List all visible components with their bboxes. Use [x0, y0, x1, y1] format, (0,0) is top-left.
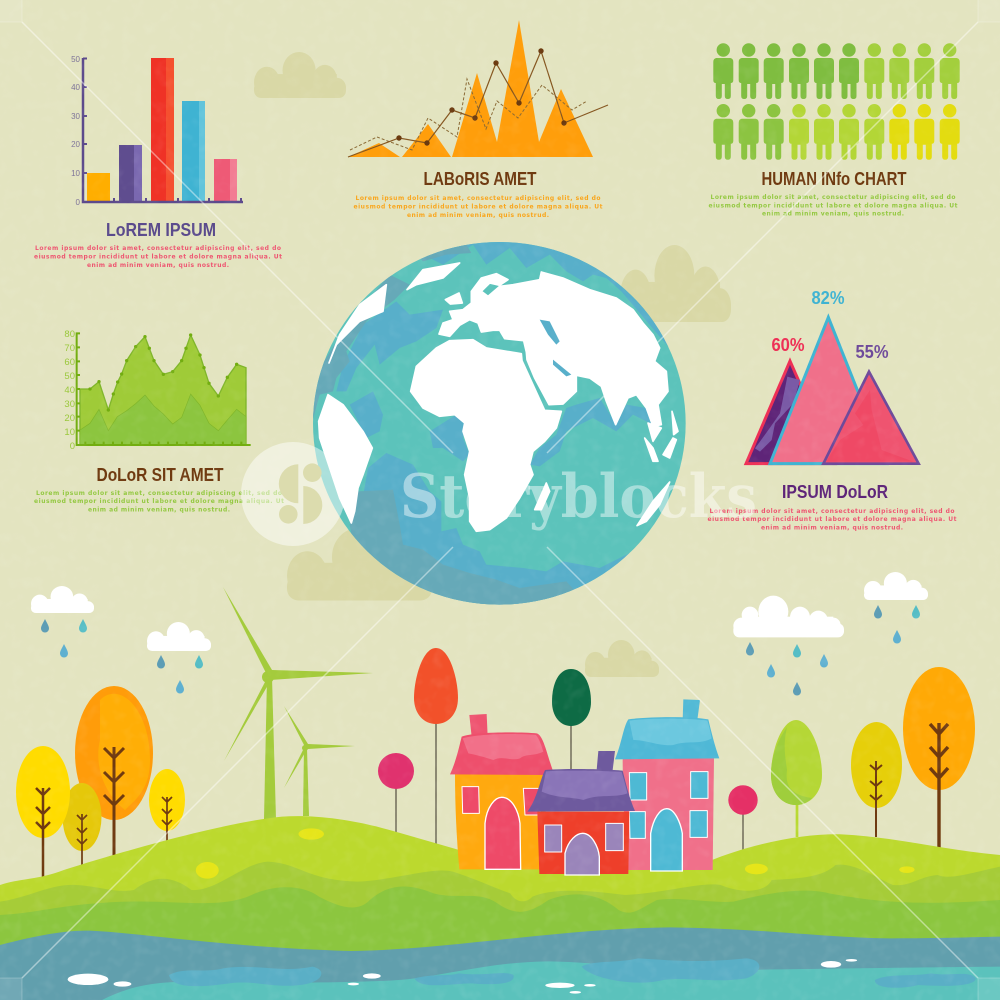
river dark band: [0, 927, 1000, 1000]
heading: lorem ipsum: LoREM IPSUM: [106, 220, 216, 240]
label: 60 percent: 60%: [772, 335, 804, 355]
text block: dolor sit amet: Lorem ipsum dolor sit amet, consectetur adipiscing elit, sed do: [36, 490, 282, 497]
cloud: white right large: [733, 596, 844, 637]
text block: ipsum dolor: [708, 508, 957, 532]
cloud: white right small: [864, 572, 928, 600]
bar chart: 30: [71, 112, 81, 121]
text block: human info chart: [708, 194, 958, 218]
bar chart: [71, 55, 243, 207]
trees centre: [378, 648, 758, 850]
text block: dolor sit amet: [34, 490, 284, 514]
tree: pink lollipop right: [728, 785, 758, 850]
tree: small yellow: [149, 769, 185, 842]
cloud: white centre left: [147, 622, 211, 651]
text block: dolor sit amet: eiusmod tempor incididunt ut labore et dolore magna aliqua. Ut: [34, 498, 284, 505]
text block: lorem ipsum: enim ad minim veniam, quis nostrud.: [87, 262, 229, 269]
tree: golden: [851, 722, 902, 837]
yellow hill spots: [196, 828, 915, 879]
tree: olive yellow: [62, 783, 102, 867]
bar chart: 50: [71, 55, 81, 64]
area chart axis labels: [64, 329, 75, 452]
label: 82 percent: 82%: [812, 288, 844, 308]
tree: large orange: [75, 686, 153, 857]
panel: mountain line chart: [348, 20, 608, 219]
tree: pink lollipop left: [378, 753, 414, 832]
tree: dark green balloon: [552, 669, 591, 775]
continents: [319, 263, 678, 531]
panel: human info chart: [708, 43, 960, 217]
cloud: beige behind globe right: [620, 245, 731, 322]
wind turbine large: [223, 587, 373, 819]
area chart axis labels: 80: [64, 329, 75, 340]
bar chart: 20: [71, 140, 81, 149]
river teal band: [102, 961, 1000, 1000]
heading: laboris amet: LABoRIS AMET: [424, 169, 536, 189]
watermark: logo: [241, 442, 345, 546]
panel: triangle percentages: [708, 288, 957, 532]
tree: red balloon: [414, 648, 458, 845]
text block: human info chart: Lorem ipsum dolor sit amet, consectetur adipiscing elit, sed do: [710, 194, 956, 201]
triangle chart: [746, 317, 919, 464]
text block: lorem ipsum: Lorem ipsum dolor sit amet, consectetur adipiscing elit, sed do: [35, 245, 281, 252]
text block: ipsum dolor: eiusmod tempor incididunt ut labore et dolore magna aliqua. Ut: [708, 516, 957, 523]
area chart axis labels: 50: [64, 371, 75, 382]
heading: dolor sit amet: DoLoR SIT AMET: [96, 465, 224, 485]
text block: laboris amet: enim ad minim veniam, quis nostrud.: [407, 212, 549, 219]
bar chart: 40: [71, 83, 81, 92]
panel: area chart: [34, 329, 284, 514]
area chart axis labels: 20: [64, 413, 75, 424]
watermark: wordmark: Storyblocks: [400, 462, 757, 532]
text block: human info chart: eiusmod tempor incididunt ut labore et dolore magna aliqua. Ut: [708, 202, 958, 210]
text block: laboris amet: eiusmod tempor incididunt ut labore et dolore magna aliqua. Ut: [354, 204, 603, 210]
wind turbine small: [284, 706, 355, 816]
tree: light green: [771, 720, 822, 837]
people row two: [713, 104, 960, 160]
text block: ipsum dolor: enim ad minim veniam, quis nostrud.: [761, 524, 903, 532]
hills mid: [0, 862, 1000, 1000]
text block: laboris amet: Lorem ipsum dolor sit amet, consectetur adipiscing elit, sed do: [356, 195, 600, 202]
tree: tall yellow: [16, 746, 70, 877]
area chart axis labels: 40: [64, 385, 75, 396]
river blobs: [169, 958, 976, 988]
dashed line series: [350, 79, 587, 150]
ground and river: [0, 816, 1000, 1000]
text block: dolor sit amet: enim ad minim veniam, quis nostrud.: [88, 506, 230, 514]
white ripples: [68, 959, 857, 994]
heading: ipsum dolor: IPSUM DoLoR: [782, 482, 888, 502]
area chart axis labels: 30: [64, 399, 75, 410]
globe: [313, 242, 686, 605]
trees left: [16, 686, 185, 877]
tree: large orange right: [903, 667, 975, 849]
cloud: upper beige: [254, 52, 346, 98]
panel: bar chart: [34, 55, 282, 269]
people row one: [713, 43, 960, 99]
house: orange: [450, 714, 553, 869]
orange area chart: [348, 20, 593, 157]
area chart axis labels: 70: [64, 343, 75, 354]
text block: human info chart: enim ad minim veniam, quis nostrud.: [762, 210, 904, 218]
cloud: beige behind globe left: [287, 528, 432, 600]
bar chart: 10: [71, 169, 81, 178]
house: red: [527, 751, 635, 875]
hills dark: [0, 887, 1000, 1000]
text block: ipsum dolor: Lorem ipsum dolor sit amet, consectetur adipiscing elit, sed do: [710, 508, 954, 515]
house: pink: [615, 699, 719, 871]
houses: [450, 699, 719, 875]
heading: human info chart: HUMAN INfo CHART: [762, 169, 906, 189]
label: 55 percent: 55%: [856, 342, 888, 362]
solid line series with points: [348, 48, 608, 157]
cloud: beige lower: [585, 640, 659, 677]
text block: laboris amet: [354, 195, 603, 219]
area chart axis labels: 0: [70, 441, 75, 452]
trees right: [771, 667, 975, 849]
rain drops: [41, 605, 920, 696]
hills light: [0, 816, 1000, 1000]
text block: lorem ipsum: eiusmod tempor incididunt ut labore et dolore magna aliqua. Ut: [34, 254, 282, 260]
area chart axis labels: 10: [64, 427, 75, 438]
area chart: [77, 333, 251, 445]
text block: lorem ipsum: [34, 245, 282, 269]
cloud: white left: [31, 586, 94, 613]
area chart axis labels: 60: [64, 357, 75, 368]
bar chart: 0: [76, 198, 81, 207]
